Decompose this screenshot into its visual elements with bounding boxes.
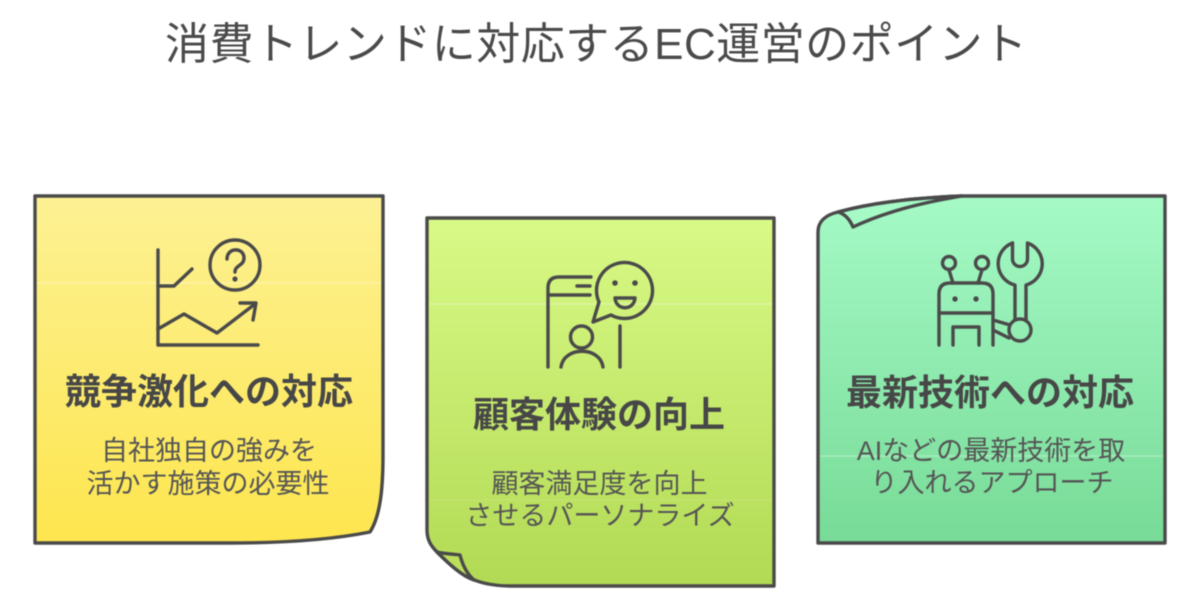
icon: robot with wrench [939, 243, 1042, 345]
page fold [838, 196, 962, 227]
description: り入れるアプローチ [870, 468, 1114, 498]
description: AIなどの最新技術を取 [857, 436, 1125, 466]
panel: 競争激化への対応 [35, 196, 383, 543]
description: 顧客満足度を向上 [492, 469, 708, 499]
icon: phone with smiling speech bubble [548, 262, 653, 367]
panel: 最新技術への対応 [818, 196, 1165, 543]
description: させるパーソナライズ [465, 501, 735, 531]
icon: chart with question mark [158, 240, 260, 345]
title: 消費トレンドに対応するEC運営のポイント [165, 20, 1027, 69]
page fold [437, 552, 474, 580]
panel: 顧客体験の向上 [427, 218, 774, 586]
heading: 最新技術への対応 [846, 372, 1134, 413]
description: 自社独自の強みを [101, 436, 317, 466]
sticky note: yellow [35, 196, 383, 543]
heading: 顧客体験の向上 [473, 394, 725, 435]
sticky note: green [818, 196, 1165, 543]
sticky note: lime [427, 218, 774, 586]
description: 活かす施策の必要性 [86, 469, 330, 499]
heading: 競争激化への対応 [65, 371, 353, 412]
